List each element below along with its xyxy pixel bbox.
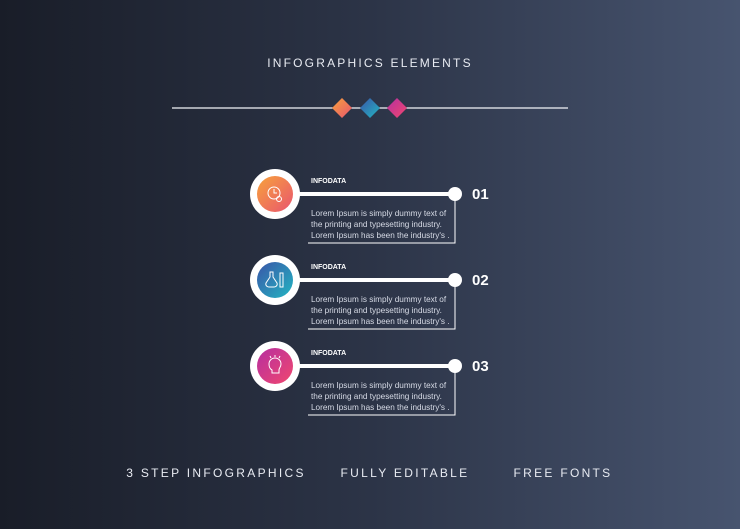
step 1: Lorem Ipsum has been the industry's . (311, 231, 450, 240)
title: INFOGRAPHICS ELEMENTS (267, 56, 473, 70)
step 3: Lorem Ipsum is simply dummy text of (311, 381, 447, 390)
step 2 (250, 255, 489, 329)
step 1: Lorem Ipsum is simply dummy text of (311, 209, 447, 218)
step 3: the printing and typesetting industry. (311, 392, 442, 401)
footer labels: FREE FONTS (513, 466, 613, 480)
step 3: INFODATA (311, 350, 346, 357)
footer labels: FULLY EDITABLE (341, 466, 469, 480)
step 3: 03 (472, 358, 489, 375)
step 1: INFODATA (311, 178, 346, 185)
step 1 (250, 169, 489, 243)
footer labels (126, 466, 613, 480)
step 1: 01 (472, 186, 489, 203)
step 2: 02 (472, 272, 489, 289)
step 2: Lorem Ipsum is simply dummy text of (311, 295, 447, 304)
step 2: the printing and typesetting industry. (311, 306, 442, 315)
step 3: Lorem Ipsum has been the industry's . (311, 403, 450, 412)
icon: head (269, 355, 281, 373)
step 2: Lorem Ipsum has been the industry's . (311, 317, 450, 326)
title divider with diamonds (172, 98, 568, 118)
step 3 (250, 341, 489, 415)
icon: clock (268, 187, 282, 202)
icon: flask (266, 272, 283, 287)
footer labels: 3 STEP INFOGRAPHICS (126, 466, 306, 480)
step 2: INFODATA (311, 264, 346, 271)
step 1: the printing and typesetting industry. (311, 220, 442, 229)
